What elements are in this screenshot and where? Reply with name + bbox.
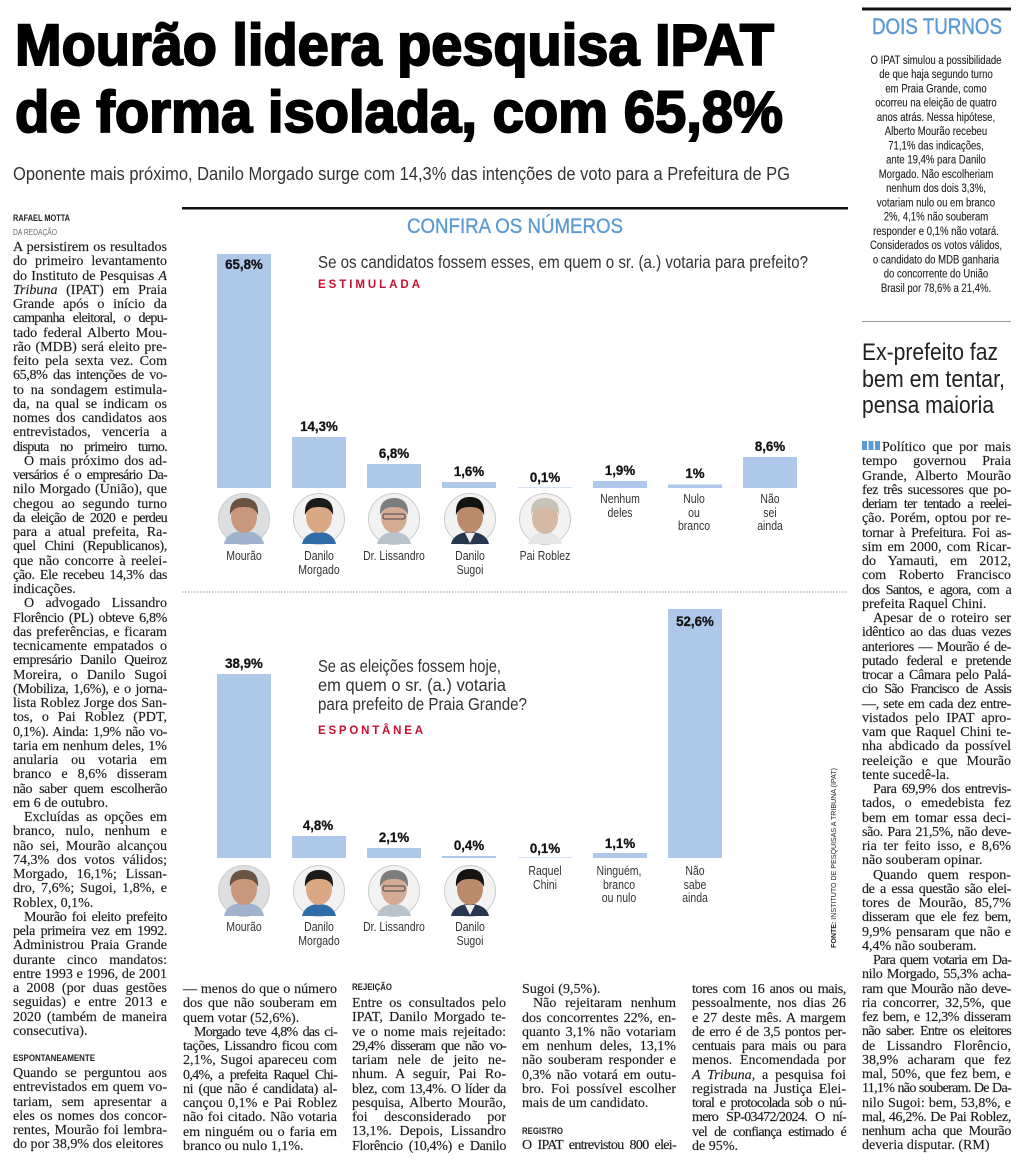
article column 4: Não rejeitaram nenhum: [533, 995, 676, 1011]
article column 2: dos que não souberam em: [183, 995, 337, 1011]
side article: fez bem, e 12,3% disseram: [862, 1009, 1011, 1025]
side article: ria ter feito isso, e 8,6%: [862, 838, 1011, 854]
side article: 4,4% não souberam.: [862, 938, 977, 954]
candidate labels: Sugoi: [457, 935, 483, 948]
article column 1: Grande após o início da: [13, 296, 167, 312]
article column 3: tariam nele de jeito ne-: [352, 1052, 506, 1068]
candidate labels: Danilo: [304, 550, 334, 563]
article column 1: empresário Danilo Queiroz: [13, 652, 167, 668]
bar chart: espontanea: 0,4%: [454, 838, 484, 853]
bar chart: estimulada: [217, 254, 797, 577]
question 1: ESTIMULADA: [318, 279, 420, 291]
article column 1 continuation: entrevistados em quem vo-: [13, 1079, 167, 1095]
side headline: Ex-prefeito faz: [862, 339, 998, 366]
article column 4: 0,3% não votará em outu-: [522, 1066, 676, 1082]
article column 1 continuation: rentes, Mourão foi lembra-: [13, 1122, 167, 1138]
article column 1: do primeiro levantamento: [13, 253, 167, 269]
article column 1: branco, nulo, nenhum e: [13, 823, 167, 839]
section label: rejeicao: REJEIÇÃO: [352, 982, 392, 992]
side article: não saber. Entre os eleitores: [862, 1023, 1011, 1039]
side article: ram que Mourão não deve-: [862, 980, 1011, 996]
bar chart: estimulada: 14,3%: [300, 419, 338, 434]
sidebar: dois turnos: Brasil por 78,6% a 21,4%.: [881, 282, 991, 295]
side article: disseram que ele fez bem,: [862, 909, 1011, 925]
article column 1: para a atual prefeita, Ra-: [13, 524, 167, 540]
article column 1: nomes dos candidatos aos: [13, 410, 167, 426]
article column 1: to na sondagem estimula-: [13, 382, 167, 398]
article column 1: 74,3% dos votos válidos;: [13, 852, 167, 868]
source note: FONTE: INSTITUTO DE PESQUISAS A TRIBUNA (IPAT): [829, 768, 838, 948]
candidate labels: ainda: [682, 892, 708, 905]
sidebar: dois turnos: responder e 0,1% não votará.: [873, 225, 999, 238]
bar chart: estimulada: 1,9%: [605, 463, 635, 478]
side article: cio São Francisco de Assis: [862, 681, 1011, 697]
candidate labels: Danilo: [455, 921, 485, 934]
article column 1: tecnicamente empatados o: [13, 638, 167, 654]
article column 1: 0,1%). Ainda: 1,9% não vo-: [13, 724, 167, 740]
bar chart: estimulada: 1,6%: [454, 464, 484, 479]
side article: ria concorrer, 32,5%, que: [862, 995, 1011, 1011]
article column 4: bro. Foi possível escolher: [522, 1081, 676, 1097]
article column 5: mero SP-03472/2024. O ní-: [692, 1109, 846, 1125]
article column 5: menos. Encomendada por: [692, 1052, 846, 1068]
side headline: pensa maioria: [862, 392, 995, 419]
question 2: ESPONTÂNEA: [318, 724, 423, 737]
article column 2: branco ou nulo 1,1%.: [183, 1138, 304, 1154]
article column 1: tos, o Pai Roblez (PDT,: [13, 709, 167, 725]
candidate labels: Nenhum: [600, 493, 640, 506]
bar chart: estimulada: 0,1%: [530, 470, 560, 485]
article column 5: [691, 981, 846, 1154]
side article: não souberam opinar.: [862, 852, 983, 868]
article column 1: A persistirem os resultados: [13, 239, 167, 255]
side article: Para quem votaria em Da-: [873, 952, 1011, 968]
article column 2: não foi citado. Não votaria: [183, 1109, 337, 1125]
article column 1: Excluídas as opções em: [24, 809, 167, 825]
article column 2: tações, Lissandro ficou com: [183, 1038, 337, 1054]
article column 1: pela primeira vez em 1992.: [13, 923, 167, 939]
article column 2: ni (que não é candidata) al-: [183, 1081, 337, 1097]
question 1: [318, 252, 808, 291]
bar chart: espontanea: [217, 609, 722, 948]
side article: tente sucedê-la.: [862, 767, 949, 783]
article column 4: Sugoi (9,5%).: [522, 981, 600, 997]
candidate labels: Ninguém,: [597, 865, 641, 878]
article column 1: da, na qual se indicam os: [13, 396, 167, 412]
candidate labels: Mourão: [226, 921, 262, 934]
sidebar: dois turnos: em Praia Grande, como: [885, 83, 987, 96]
article column 1: não saber quem escolherão: [13, 780, 167, 796]
candidate labels: Dr. Lissandro: [363, 921, 425, 934]
sidebar: dois turnos: de que haja segundo turno: [879, 68, 993, 81]
article column 1: taria em nenhum deles, 1%: [13, 738, 167, 754]
article column 1 continuation: tariam, sem apresentar a: [13, 1094, 167, 1110]
article column 1: seguidas) e entre 2013 e: [13, 994, 167, 1010]
article column 2: 0,4%, a prefeita Raquel Chi-: [183, 1066, 337, 1082]
article column 1: Mourão foi eleito prefeito: [24, 909, 167, 925]
article column 1: entre 1993 e 1996, de 2001: [13, 966, 167, 982]
sidebar: dois turnos: 71,1% das indicações,: [888, 140, 984, 153]
article column 1: consecutiva).: [13, 1023, 88, 1039]
bar chart: espontanea: 2,1%: [379, 830, 409, 845]
article column 3: 13,1%. Depois, Lissandro: [352, 1123, 506, 1139]
byline: DA REDAÇÃO: [13, 227, 57, 237]
article column 1: [12, 239, 168, 1039]
side article: deriam ter tentado a reelei-: [862, 496, 1011, 512]
article column 5: de erro é de 3,5 pontos per-: [692, 1024, 846, 1040]
article column 1: branco e 8,6% disseram: [13, 766, 167, 782]
side article: do Yamauti, em 2012,: [862, 553, 1011, 569]
candidate labels: Dr. Lissandro: [363, 550, 425, 563]
title: [15, 13, 783, 145]
article column 1: Moreira, o Danilo Sugoi: [13, 666, 167, 682]
candidate labels: sei: [763, 507, 777, 520]
article column 5: de 95%.: [692, 1138, 738, 1154]
sidebar: dois turnos: Morgado. Não escolheriam: [879, 168, 993, 181]
sidebar: dois turnos: o candidato do MDB ganharia: [873, 254, 999, 267]
candidate labels: sabe: [684, 879, 706, 892]
article column 1: tado federal Alberto Mou-: [13, 324, 167, 340]
side article: ção. Porém, optou por re-: [862, 510, 1011, 526]
question 2: [318, 656, 527, 737]
side article: Grande, Alberto Mourão: [862, 468, 1011, 484]
article column 4: mais de um candidato.: [522, 1095, 648, 1111]
article column 4: [522, 981, 676, 1111]
article column 1: chegou ao segundo turno: [13, 496, 167, 512]
article column 3: IPAT, Danilo Morgado te-: [352, 1009, 506, 1025]
article column 1: nilo Morgado (União), que: [13, 481, 167, 497]
article column 3: foi desconsiderado por: [352, 1109, 506, 1125]
article column 4 continuation: O IPAT entrevistou 800 elei-: [522, 1137, 676, 1153]
article column 5: centuais para mais ou para: [692, 1038, 846, 1054]
article column 3: 29,4% disseram que não vo-: [352, 1038, 506, 1054]
side article: putado federal e pretende: [862, 653, 1011, 669]
article column 1: indicações.: [13, 581, 76, 597]
article column 1: Florêncio (PL) obteve 6,8%: [13, 610, 167, 626]
article column 5: registrada na Justiça Elei-: [692, 1081, 846, 1097]
article column 1: da eleição de 2020 e perdeu: [13, 510, 167, 526]
candidate labels: Danilo: [304, 921, 334, 934]
article column 1 continuation: Quando se perguntou aos: [13, 1065, 167, 1081]
article column 1: O advogado Lissandro: [24, 595, 167, 611]
article column 1: dro, 7,6%; Sugoi, 1,8%, e: [13, 880, 167, 896]
article column 3: Entre os consultados pelo: [352, 995, 506, 1011]
article column 1 continuation: [13, 1065, 167, 1152]
article column 2: cançou 0,1% e Pai Roblez: [183, 1095, 337, 1111]
sidebar: dois turnos: Alberto Mourão recebeu: [885, 125, 987, 138]
sidebar: dois turnos: ocorreu na eleição de quatro: [875, 97, 997, 110]
title: Mourão lidera pesquisa IPAT: [15, 13, 774, 78]
side article: dos Santos, e agora, com a: [862, 582, 1011, 598]
candidate labels: Mourão: [226, 550, 262, 563]
candidate photos: [218, 494, 570, 544]
article column 5: vel de confiança estimado é: [692, 1124, 846, 1140]
article column 3: pesquisa, Alberto Mourão,: [352, 1095, 506, 1111]
title: de forma isolada, com 65,8%: [15, 80, 783, 145]
candidate labels: Não: [685, 865, 705, 878]
candidate labels: [226, 493, 783, 577]
side article: tados, o emedebista fez: [862, 795, 1011, 811]
side article: de a essa questão são elei-: [862, 881, 1011, 897]
side article: idêntico ao das duas vezes: [862, 624, 1011, 640]
article column 1: a 2008 (por duas gestões: [13, 980, 167, 996]
side article: são. Para 21,5%, não deve-: [862, 824, 1011, 840]
byline: [13, 213, 70, 237]
side article: com Roberto Francisco: [862, 567, 1011, 583]
side article: 9,9% pensaram que não e: [862, 924, 1011, 940]
sidebar: dois turnos: nenhum dos dois 3,3%,: [886, 182, 986, 195]
sidebar: dois turnos: ante 19,4% para Danilo: [886, 154, 986, 167]
byline: RAFAEL MOTTA: [13, 213, 70, 223]
article column 5: toral e protocolada sob o nú-: [692, 1095, 846, 1111]
candidate labels: [226, 865, 708, 948]
side article: vam que Raquel Chini te-: [862, 724, 1011, 740]
candidate labels: Não: [760, 493, 780, 506]
article column 1: O mais próximo dos ad-: [24, 453, 167, 469]
article column 1: que não concorre à reelei-: [13, 552, 167, 568]
article column 5: e 27 deste mês. A margem: [692, 1010, 846, 1026]
side article: nenhum acha que Mourão: [862, 1123, 1011, 1139]
article column 4: dos concorrentes 22%, en-: [522, 1010, 676, 1026]
article column 1: feito pela sexta vez. Com: [13, 353, 167, 369]
article column 5: A Tribuna, a pesquisa foi: [692, 1066, 846, 1082]
article column 1: durante cinco mandatos:: [13, 952, 167, 968]
side article: tores de Mourão, 85,7%: [862, 895, 1011, 911]
article column 1: 2020 (também de maneira: [13, 1008, 167, 1024]
sidebar: dois turnos: votariam nulo ou em branco: [877, 197, 995, 210]
side article: fez três sucessores que po-: [862, 482, 1011, 498]
side article: 11,1% não souberam. De Da-: [862, 1080, 1011, 1096]
side article: tempo governou Praia: [862, 453, 1011, 469]
side article: nilo Morgado, 55,3% acha-: [862, 966, 1011, 982]
side article: de Lissandro Florêncio,: [862, 1038, 1011, 1054]
article column 1: Tribuna (IPAT) em Praia: [13, 282, 167, 298]
sidebar: dois turnos: O IPAT simulou a possibilidade: [871, 54, 1002, 67]
question 1: Se os candidatos fossem esses, em quem o sr. (a.) votaria para prefeito?: [318, 252, 808, 272]
bar chart: estimulada: 65,8%: [225, 257, 263, 272]
question 2: Se as eleições fossem hoje,: [318, 656, 501, 676]
article column 1: rão (MDB) será eleito pre-: [13, 339, 167, 355]
article column 3: ve o nome mais rejeitado:: [352, 1024, 506, 1040]
bar chart: espontanea: 0,1%: [530, 841, 560, 856]
candidate labels: Sugoi: [457, 564, 483, 577]
candidate labels: ou: [688, 507, 700, 520]
article column 1: anularia ou votaria em: [13, 752, 167, 768]
side article: anteriores — Mourão é de-: [862, 638, 1011, 654]
sidebar: dois turnos: DOIS TURNOS: [872, 14, 1002, 39]
side article: nilo Sugoi: bem, 53,8%, e: [862, 1094, 1011, 1110]
subtitle: Oponente mais próximo, Danilo Morgado surge com 14,3% das intenções de voto para a Prefeitura de PG: [13, 164, 790, 184]
article column 1: do Instituto de Pesquisas A: [13, 268, 167, 284]
article column 2: quem votar (52,6%).: [183, 1010, 299, 1026]
article column 3: [352, 995, 506, 1154]
article column 1: Administrou Praia Grande: [13, 937, 167, 953]
side headline: [862, 339, 1005, 419]
article column 1: 65,8% das intenções de vo-: [13, 367, 167, 383]
candidate labels: Chini: [533, 879, 557, 892]
bar chart: estimulada: 1%: [685, 466, 705, 481]
side article: deveria disputar. (RM): [862, 1137, 990, 1153]
section label: registro: REGISTRO: [522, 1126, 563, 1136]
question 2: para prefeito de Praia Grande?: [318, 694, 527, 714]
side article: trocar a Câmara pelo Palá-: [862, 667, 1011, 683]
candidate labels: Morgado: [298, 564, 340, 577]
side article: Quando quem respon-: [873, 866, 1011, 882]
side article: bem em tomar essa deci-: [862, 810, 1011, 826]
article column 2: em ninguém ou o faria em: [183, 1124, 337, 1140]
article column 1: das preferências, e ficaram: [13, 624, 167, 640]
side article: sim em 2000, com Ricar-: [862, 539, 1011, 555]
article column 4: não souberam responder e: [522, 1052, 676, 1068]
sidebar: dois turnos: do concorrente do União: [884, 268, 988, 281]
candidate labels: deles: [607, 507, 633, 520]
side article: mal, 50%, que fez bem, e: [862, 1066, 1011, 1082]
bar chart: espontanea: 38,9%: [225, 656, 263, 671]
question 2: em quem o sr. (a.) votaria: [318, 675, 506, 695]
side article: prefeita Raquel Chini.: [862, 596, 986, 612]
section label: espontaneamente: ESPONTANEAMENTE: [13, 1053, 95, 1063]
article column 1: quel Chini (Republicanos),: [13, 538, 167, 554]
article column 1: entrevistados, venceria a: [13, 424, 167, 440]
side article: Apesar de o roteiro ser: [873, 610, 1011, 626]
article column 3: blez, com 13,4%. O líder da: [352, 1080, 506, 1096]
side headline: bem em tentar,: [862, 366, 1005, 393]
side article: Político que por mais: [882, 439, 1011, 455]
article column 1: Morgado, 16,1%; Lissan-: [13, 866, 167, 882]
article column 1 continuation: eles os nomes dos concor-: [13, 1108, 167, 1124]
article column 2: 2,1%, Sugoi apareceu com: [183, 1052, 337, 1068]
article column 1: campanha eleitoral, o depu-: [13, 310, 167, 326]
article column 3: Florêncio (10,4%) e Danilo: [352, 1138, 506, 1154]
side article: Para 69,9% dos entrevis-: [873, 781, 1011, 797]
chart heading: CONFIRA OS NÚMEROS: [407, 213, 623, 238]
article column 1: em 6 de outubro.: [13, 795, 108, 811]
candidate labels: Morgado: [298, 935, 340, 948]
bar chart: estimulada: 6,8%: [379, 446, 409, 461]
article column 1: ção. Ele recebeu 14,3% das: [13, 567, 167, 583]
candidate labels: ainda: [757, 520, 783, 533]
article column 2: — menos do que o número: [183, 981, 337, 997]
icon: blue squares: [862, 441, 880, 450]
side article: [862, 439, 1012, 1153]
article column 2: Morgado teve 4,8% das ci-: [194, 1024, 337, 1040]
sidebar: dois turnos: 2%, 4,1% não souberam: [884, 211, 988, 224]
bar chart: espontanea: 1,1%: [605, 836, 635, 851]
side article: mal, 46,2%. De Pai Roblez,: [862, 1109, 1011, 1125]
bar chart: estimulada: 8,6%: [755, 439, 785, 454]
article column 5: pessoalmente, nos dias 26: [692, 995, 846, 1011]
side article: reeleição e que Mourão: [862, 752, 1011, 768]
article column 2: [182, 981, 338, 1154]
candidate labels: Pai Roblez: [520, 550, 571, 563]
article column 1: disputa no primeiro turno.: [13, 438, 167, 454]
article column 3: nhum. A seguir, Pai Ro-: [352, 1066, 506, 1082]
candidate labels: branco: [678, 520, 710, 533]
candidate labels: Raquel: [528, 865, 562, 878]
sidebar: dois turnos: [862, 8, 1011, 295]
sidebar: dois turnos: anos atrás. Nessa hipótese,: [877, 111, 995, 124]
side article: 38,9% acharam que fez: [862, 1052, 1011, 1068]
article column 1: versários é o empresário Da-: [13, 467, 167, 483]
candidate labels: Danilo: [455, 550, 485, 563]
sidebar: dois turnos: Considerados os votos válidos,: [870, 239, 1002, 252]
side article: tornar à Prefeitura. Foi as-: [862, 524, 1011, 540]
article column 5: tores com 16 anos ou mais,: [692, 981, 846, 997]
bar chart: espontanea: 4,8%: [303, 818, 333, 833]
article column 1: não sei, Mourão alcançou: [13, 838, 167, 854]
article column 1: Roblex, 0,1%.: [13, 894, 93, 910]
article column 4: em nenhum deles, 13,1%: [522, 1038, 676, 1054]
article column 1: lista Roblez Jorge dos San-: [13, 695, 167, 711]
candidate labels: branco: [603, 879, 635, 892]
side article: —, sete em cada dez entre-: [862, 696, 1011, 712]
bar chart: espontanea: 52,6%: [676, 614, 714, 629]
side article: vistados pelo IPAT apro-: [862, 710, 1011, 726]
article column 1: (Mobiliza, 1,6%), e o jorna-: [13, 681, 167, 697]
candidate photos: [218, 866, 496, 916]
side article: nha abdicado da possível: [862, 738, 1011, 754]
candidate labels: Nulo: [683, 493, 705, 506]
article column 1 continuation: do por 38,9% dos eleitores: [13, 1136, 163, 1152]
article column 4: quanto 3,1% não votariam: [522, 1024, 676, 1040]
candidate labels: ou nulo: [602, 892, 636, 905]
